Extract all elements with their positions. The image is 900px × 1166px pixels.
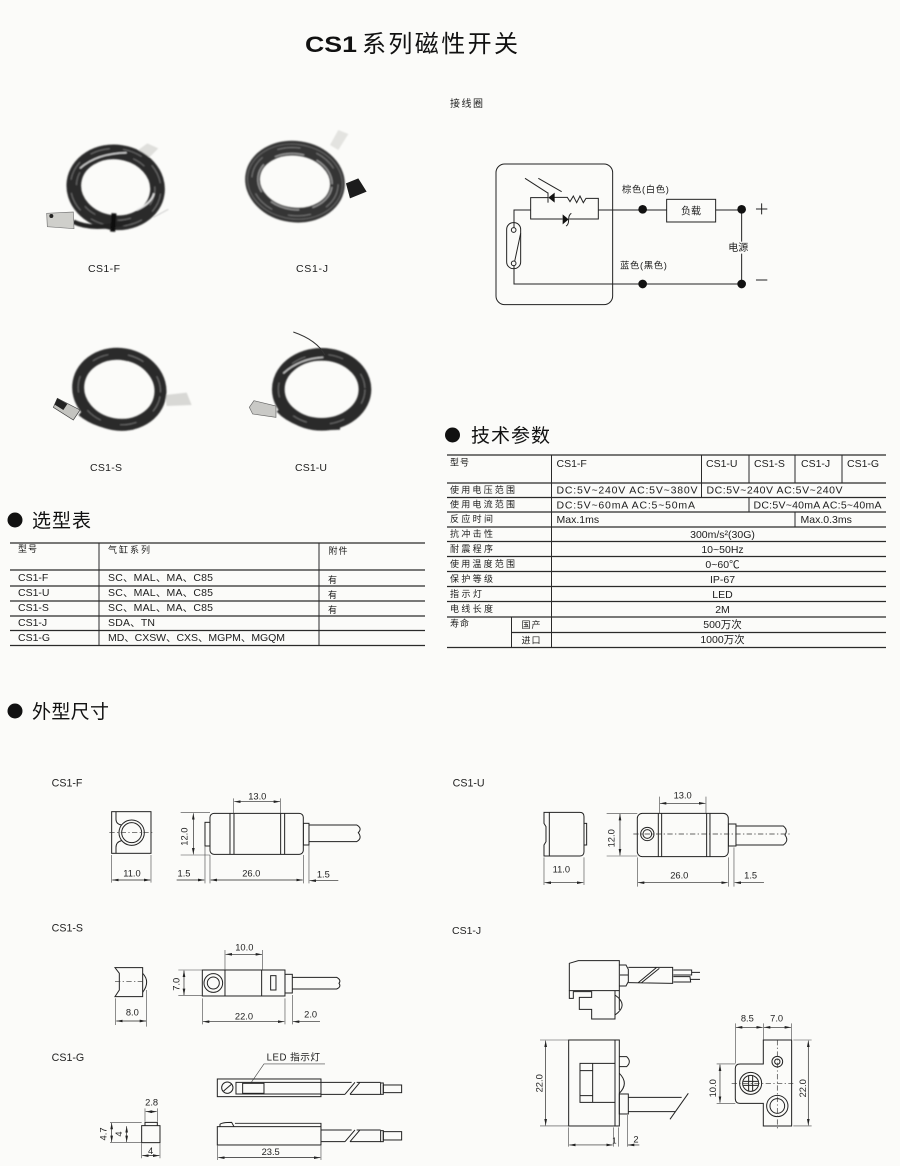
CS1-S side view xyxy=(202,970,340,996)
CS1-S dimension lines xyxy=(116,943,320,1027)
CS1-U dimension lines xyxy=(544,790,764,887)
table: technical parameters: 保护等级 xyxy=(450,573,494,584)
drawing: CS1-F dimensions xyxy=(52,778,360,883)
table: technical parameters: CS1-F xyxy=(556,458,587,470)
title: CS1 xyxy=(305,32,357,57)
load box: 负载 xyxy=(681,204,701,217)
CS1-J dimension lines: 1 xyxy=(612,1136,617,1145)
CS1-F dimension lines: 1.5 xyxy=(178,869,190,879)
title: 系列磁性开关 xyxy=(362,31,518,58)
CS1-U dimension lines: 11.0 xyxy=(553,864,570,874)
LED indicator callout: LED 指示灯 xyxy=(267,1051,321,1063)
CS1-J dimension lines: 22.0 xyxy=(798,1079,808,1097)
table: selection: 有 xyxy=(328,589,338,600)
table: technical parameters: CS1-S xyxy=(754,458,785,470)
CS1-F end view xyxy=(109,812,153,853)
photo: CS1-S coil xyxy=(53,347,192,431)
table: technical parameters: DC:5V~60mA AC:5~50mA xyxy=(556,500,695,512)
table: technical parameters: 使用电压范围 xyxy=(450,484,516,495)
photo: CS1-U coil xyxy=(249,332,365,428)
table: selection: SDA、TN xyxy=(108,617,155,629)
CS1-F dimension lines: 26.0 xyxy=(242,869,260,879)
load box xyxy=(667,199,716,222)
table: technical parameters: 抗冲击性 xyxy=(450,528,494,539)
CS1-G dimension lines: 4.7 xyxy=(99,1127,109,1140)
table: technical parameters: 国产 xyxy=(522,619,542,630)
table: technical parameters: DC:5V~40mA AC:5~40mA xyxy=(754,500,882,512)
table: selection: MD、CXSW、CXS、MGPM、MGQM xyxy=(108,632,285,644)
table: selection: CS1-S xyxy=(18,602,49,614)
CS1-F dimension lines: 11.0 xyxy=(123,869,141,879)
wires and terminals xyxy=(514,205,746,288)
CS1-J dimension lines: 22.0 xyxy=(535,1074,545,1092)
table: technical parameters: CS1-U xyxy=(706,458,738,470)
table: technical parameters: Max.1ms xyxy=(556,514,599,526)
CS1-J dimension lines xyxy=(535,1014,812,1147)
caption: CS1-U: CS1-U xyxy=(295,462,327,474)
CS1-S dimension lines: 7.0 xyxy=(171,978,181,991)
drawing: CS1-U dimensions xyxy=(453,778,790,887)
table: technical parameters: 0~60℃ xyxy=(705,559,740,571)
CS1-J rear view xyxy=(732,1040,793,1128)
CS1-J side view xyxy=(569,1040,688,1126)
CS1-G end view xyxy=(142,1122,160,1143)
drawing: CS1-S dimensions: CS1-S xyxy=(52,923,83,935)
table: selection: CS1-F xyxy=(18,572,48,584)
table: technical parameters: 进口 xyxy=(522,636,542,646)
table: selection: 有 xyxy=(328,604,338,615)
table: technical parameters: 使用温度范围 xyxy=(450,558,516,569)
table: technical parameters: LED xyxy=(712,589,733,601)
table: technical parameters: CS1-G xyxy=(847,458,879,470)
wire colour labels: 蓝色(黑色) xyxy=(620,259,668,270)
caption: CS1-F: CS1-F xyxy=(88,263,120,275)
photo: CS1-F coil xyxy=(47,143,168,232)
CS1-F dimension lines: 13.0 xyxy=(248,791,266,801)
CS1-F dimension lines: 1.5 xyxy=(317,869,330,879)
table: technical parameters: 使用电流范围 xyxy=(450,498,516,510)
table: technical parameters: 300m/s²(30G) xyxy=(690,529,755,541)
table: technical parameters: 寿命 xyxy=(450,618,470,628)
CS1-J dimension lines: 7.0 xyxy=(770,1014,783,1024)
CS1-U dimension lines: 26.0 xyxy=(670,870,688,880)
CS1-J top view xyxy=(569,961,700,1019)
table: selection: 附件 xyxy=(328,545,349,556)
label: wiring diagram: 接线圈 xyxy=(450,97,483,110)
table: technical parameters: 指示灯 xyxy=(450,588,483,599)
CS1-S dimension lines: 22.0 xyxy=(235,1012,253,1022)
heading: selection table xyxy=(8,510,92,532)
table: technical parameters: Max.0.3ms xyxy=(800,514,852,526)
heading: outline dimensions: 外型尺寸 xyxy=(32,701,110,723)
CS1-U dimension lines: 12.0 xyxy=(606,829,616,847)
drawing: CS1-F dimensions: CS1-F xyxy=(52,778,83,790)
switch housing xyxy=(496,164,613,305)
caption: CS1-S: CS1-S xyxy=(90,462,122,474)
table: technical parameters xyxy=(447,455,886,648)
label: CS1-J drawing: CS1-J xyxy=(452,925,481,937)
heading: technical parameters: 技术参数 xyxy=(471,425,551,447)
photo: CS1-J coil xyxy=(243,130,367,225)
drawing: CS1-J dimensions xyxy=(535,961,812,1147)
drawing: CS1-U dimensions: CS1-U xyxy=(453,778,485,790)
table: technical parameters: 500万次 xyxy=(703,618,742,631)
drawing: CS1-G dimensions: CS1-G xyxy=(52,1052,84,1064)
CS1-S dimension lines: 10.0 xyxy=(235,943,253,953)
CS1-G dimension lines xyxy=(99,1098,321,1160)
table: technical parameters: 1000万次 xyxy=(700,633,745,646)
table: selection: SC、MAL、MA、C85 xyxy=(108,602,213,614)
zener diode xyxy=(563,213,571,226)
CS1-F dimension lines xyxy=(112,791,338,883)
CS1-S dimension lines: 8.0 xyxy=(126,1008,139,1018)
table: selection: CS1-J xyxy=(18,617,47,629)
heading: selection table: 选型表 xyxy=(32,510,92,532)
wire colour labels: 棕色(白色) xyxy=(622,184,670,195)
table: technical parameters: 型号 xyxy=(450,458,470,468)
CS1-G dimension lines: 4 xyxy=(148,1146,153,1156)
CS1-U dimension lines: 13.0 xyxy=(674,790,692,800)
caption: CS1-J: CS1-J xyxy=(296,263,328,275)
circuit diagram xyxy=(496,164,767,305)
reed switch xyxy=(507,210,531,269)
CS1-F side view xyxy=(205,813,360,854)
table: technical parameters: DC:5V~240V AC:5V~380V xyxy=(556,484,698,496)
LED and resistor branch xyxy=(525,178,598,219)
table: selection xyxy=(10,543,425,646)
table: technical parameters: 10~50Hz xyxy=(701,544,744,556)
table: technical parameters: IP-67 xyxy=(710,574,735,586)
CS1-J dimension lines: 8.5 xyxy=(741,1014,754,1024)
table: technical parameters: CS1-J xyxy=(801,458,830,470)
CS1-J dimension lines: 10.0 xyxy=(708,1079,718,1097)
CS1-G dimension lines: 4 xyxy=(114,1131,124,1137)
table: selection: 气缸系列 xyxy=(108,544,151,555)
CS1-G dimension lines: 2.8 xyxy=(145,1098,158,1108)
drawing: CS1-G dimensions xyxy=(52,1051,402,1160)
CS1-G side view xyxy=(217,1122,402,1145)
LED indicator callout xyxy=(251,1051,325,1083)
table: selection: CS1-U xyxy=(18,587,50,599)
power label: 电源 xyxy=(728,241,748,254)
table: technical parameters: DC:5V~240V AC:5V~240V xyxy=(706,484,842,496)
table: selection: 型号 xyxy=(18,544,38,554)
CS1-J dimension lines: 2 xyxy=(633,1135,639,1145)
table: selection: CS1-G xyxy=(18,632,50,644)
table: selection: SC、MAL、MA、C85 xyxy=(108,572,213,584)
CS1-G dimension lines: 23.5 xyxy=(262,1147,280,1157)
CS1-S end view xyxy=(115,968,147,997)
CS1-U side view xyxy=(633,813,790,857)
table: selection: 有 xyxy=(328,574,338,585)
wire colour labels xyxy=(620,184,670,270)
CS1-F dimension lines: 12.0 xyxy=(180,828,190,846)
CS1-U end view xyxy=(544,812,587,856)
CS1-S dimension lines: 2.0 xyxy=(304,1010,317,1020)
CS1-G top view xyxy=(217,1079,402,1097)
plus and minus signs xyxy=(756,203,767,280)
table: technical parameters: 2M xyxy=(715,604,730,616)
drawing: CS1-S dimensions xyxy=(52,923,340,1027)
table: technical parameters: 反应时间 xyxy=(450,513,494,524)
table: selection: SC、MAL、MA、C85 xyxy=(108,587,213,599)
table: technical parameters: 耐震程序 xyxy=(450,543,494,554)
CS1-U dimension lines: 1.5 xyxy=(744,870,757,880)
table: technical parameters: 电线长度 xyxy=(450,603,494,614)
